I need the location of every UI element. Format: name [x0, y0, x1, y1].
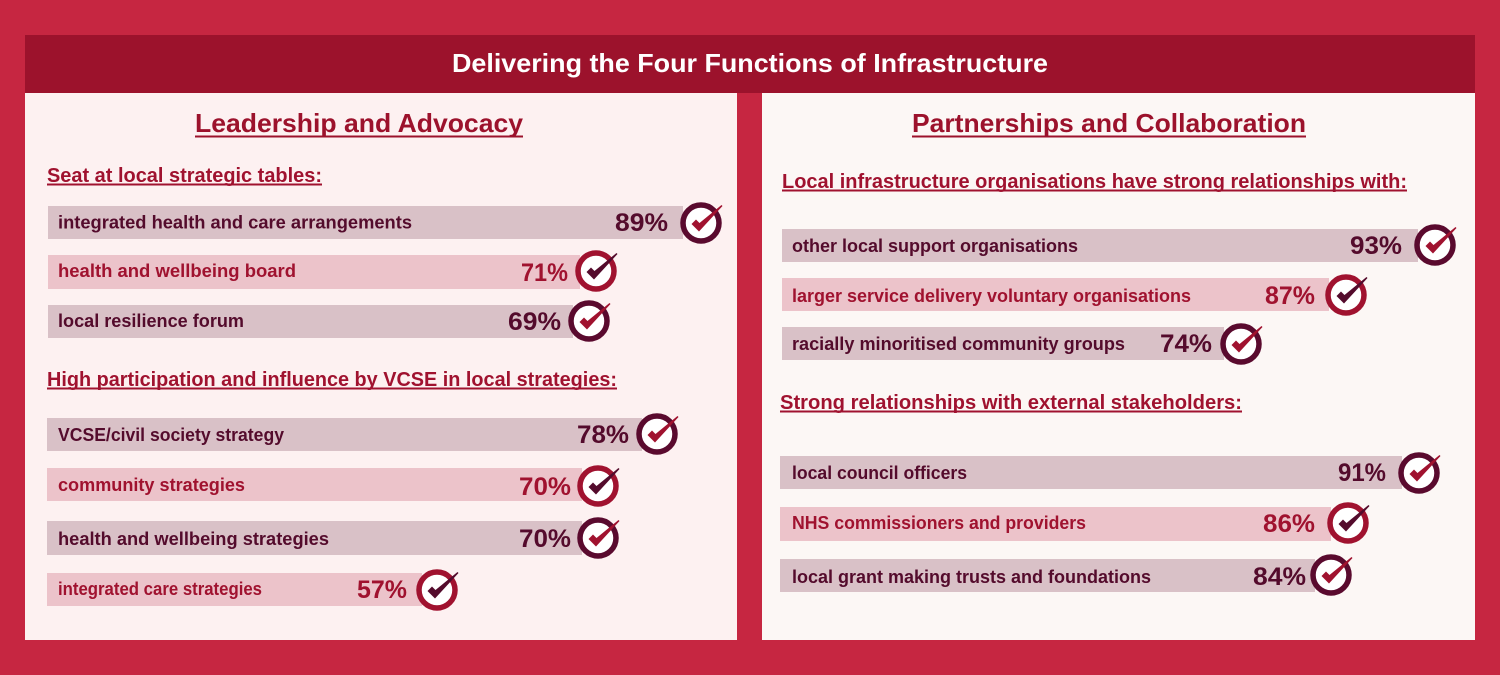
- bar: integrated health and care arrangements 89%: [48, 205, 722, 241]
- bar: integrated care strategies 57%: integrated care strategies: [58, 579, 262, 599]
- bar: other local support organisations 93%: other local support organisations: [792, 236, 1078, 256]
- bar: NHS commissioners and providers 86%: NHS commissioners and providers: [792, 513, 1086, 533]
- bar: health and wellbeing strategies 70%: 70%: [519, 525, 571, 553]
- bar: local grant making trusts and foundations 84%: 84%: [1253, 563, 1306, 591]
- subheading: seat at local strategic tables: Seat at local strategic tables:: [47, 164, 322, 187]
- bar: VCSE/civil society strategy 78%: VCSE/civil society strategy: [58, 425, 284, 445]
- bar: NHS commissioners and providers 86%: 86%: [1263, 510, 1315, 538]
- bar: VCSE/civil society strategy 78%: 78%: [577, 421, 629, 449]
- bar: health and wellbeing board 71%: 71%: [521, 259, 568, 287]
- bar: local grant making trusts and foundations 84%: [780, 557, 1352, 593]
- bar: larger service delivery voluntary organisations 87%: 87%: [1265, 282, 1315, 310]
- bar: community strategies 70%: 70%: [519, 473, 571, 501]
- bar: health and wellbeing strategies 70%: health and wellbeing strategies: [58, 529, 329, 549]
- title: Delivering the Four Functions of Infrastructure: [452, 48, 1048, 78]
- bar: other local support organisations 93%: [782, 227, 1456, 263]
- bar: health and wellbeing board 71%: health and wellbeing board: [58, 261, 296, 281]
- bar: other local support organisations 93%: 93%: [1350, 232, 1402, 260]
- bar: community strategies 70%: [47, 468, 620, 504]
- panel: partnerships and collaboration: [762, 93, 1475, 640]
- bar: local resilience forum 69%: [48, 303, 610, 339]
- bar: local grant making trusts and foundations 84%: local grant making trusts and foundations: [792, 567, 1151, 587]
- bar: racially minoritised community groups 74%: 74%: [1160, 330, 1212, 358]
- bar: integrated health and care arrangements 89%: integrated health and care arrangements: [58, 212, 412, 232]
- heading: leadership and advocacy: Leadership and Advocacy: [195, 108, 524, 138]
- panel: leadership and advocacy: [25, 93, 737, 640]
- bar: health and wellbeing board 71%: [48, 253, 618, 289]
- bar: integrated care strategies 57%: 57%: [357, 576, 407, 604]
- bar: VCSE/civil society strategy 78%: [47, 416, 678, 452]
- bar: local council officers 91%: 91%: [1338, 459, 1386, 487]
- bar: local resilience forum 69%: 69%: [508, 308, 561, 336]
- bar: integrated health and care arrangements 89%: 89%: [615, 209, 668, 237]
- bar: racially minoritised community groups 74%: [782, 326, 1262, 362]
- bar: community strategies 70%: community strategies: [58, 475, 245, 495]
- bar: local council officers 91%: local council officers: [792, 463, 967, 483]
- bar: NHS commissioners and providers 86%: [780, 505, 1370, 541]
- bar: local resilience forum 69%: local resilience forum: [58, 311, 244, 331]
- bar: local council officers 91%: [780, 455, 1440, 491]
- bar: health and wellbeing strategies 70%: [47, 520, 620, 556]
- header banner: [25, 35, 1475, 93]
- subheading: external stakeholders: Strong relationships with external stakeholders:: [780, 391, 1242, 414]
- bar: integrated care strategies 57%: [47, 572, 458, 608]
- subheading: high participation and influence: High participation and influence by VCSE in local strategies:: [47, 368, 617, 391]
- bar: larger service delivery voluntary organisations 87%: larger service delivery voluntary organisations: [792, 286, 1191, 306]
- heading: partnerships and collaboration: Partnerships and Collaboration: [912, 108, 1306, 138]
- bar: racially minoritised community groups 74%: racially minoritised community groups: [792, 334, 1125, 354]
- bar: larger service delivery voluntary organisations 87%: [782, 277, 1368, 313]
- subheading: strong relationships with: Local infrastructure organisations have strong relationships with:: [782, 170, 1407, 193]
